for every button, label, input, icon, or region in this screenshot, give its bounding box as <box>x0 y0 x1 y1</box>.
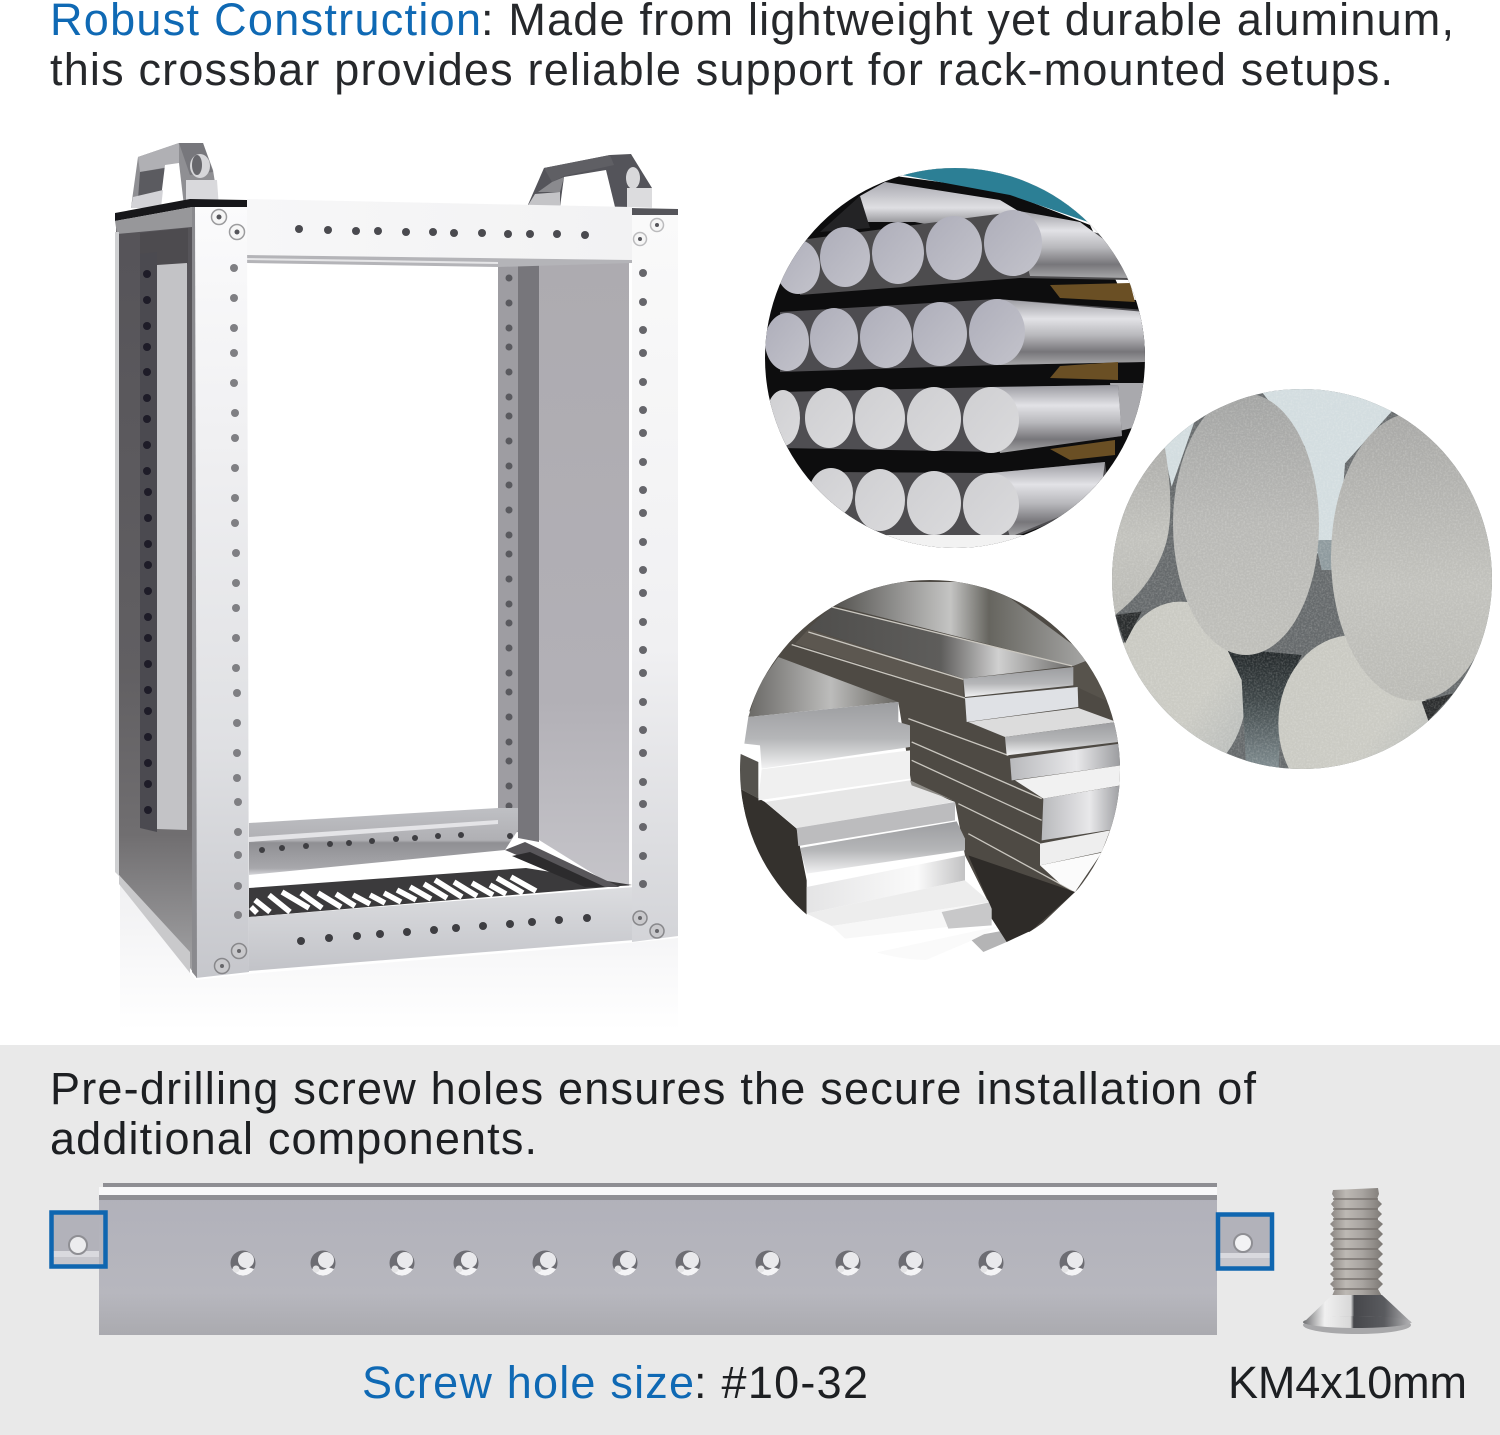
bottom crossbar <box>249 887 634 971</box>
highlight: right mounting hole <box>1218 1214 1272 1268</box>
left plate top <box>748 657 898 717</box>
icon: countersunk screw <box>1303 1188 1412 1334</box>
rod bodies <box>780 210 1145 537</box>
floor reflection <box>120 884 678 1030</box>
label: screw hole size: Screw hole size <box>362 1357 694 1408</box>
dark wedge right <box>1422 693 1453 721</box>
right stepped plates <box>963 667 1073 697</box>
rack product image <box>115 143 678 1030</box>
front right post <box>632 207 678 942</box>
left stepped plates <box>744 702 910 769</box>
lower left rod <box>1124 602 1244 753</box>
photo circle: aluminum rods <box>765 168 1145 550</box>
left rod end <box>1112 448 1170 614</box>
main plate top <box>808 607 1072 679</box>
text: pre-drilling: Pre-drilling screw holes ensures the secure installation of <box>50 1063 1256 1114</box>
text: pre-drilling <box>50 1063 1256 1164</box>
rod end faces <box>765 210 1042 537</box>
rear bottom rail <box>249 808 518 875</box>
dark wedge left <box>1115 612 1142 643</box>
label: screw hole size <box>362 1357 868 1408</box>
left dark edge <box>740 789 807 915</box>
lower centre gap <box>1228 650 1302 768</box>
photo circle: aluminum plates <box>740 580 1120 952</box>
dark plate sides <box>742 575 1130 934</box>
front left post <box>192 207 249 978</box>
highlight: left mounting hole <box>52 1212 106 1266</box>
centre rod end <box>1173 394 1319 655</box>
bottom panel background <box>0 1045 1500 1435</box>
label: screw size: KM4x10mm <box>1228 1357 1467 1408</box>
text: pre-drilling: additional components. <box>50 1113 537 1164</box>
rear plate <box>835 582 1092 666</box>
lower right rod <box>1278 636 1428 769</box>
right handle <box>527 154 652 208</box>
screw holes <box>230 1250 1084 1276</box>
photo circle: rod ends close-up <box>1112 389 1492 769</box>
right rod end <box>1331 413 1499 701</box>
deep shadow gap <box>968 855 1075 942</box>
left handle <box>131 143 219 208</box>
crossbar diagram <box>52 1183 1272 1335</box>
right tab <box>1217 1214 1272 1268</box>
bottom tray with slots <box>249 842 632 917</box>
right inner panel <box>498 262 629 886</box>
sky and top rods <box>820 168 1145 300</box>
top crossbar <box>247 199 632 267</box>
wood spacers <box>1050 283 1135 460</box>
left tab <box>52 1214 99 1266</box>
pale rod sides <box>1162 383 1405 553</box>
crossbar body <box>99 1183 1217 1335</box>
label: screw hole size: : #10-32 <box>694 1357 868 1408</box>
faded lower edge <box>886 535 1024 548</box>
heading: robust construction: this crossbar provides reliable support for rack-mounted setups. <box>50 44 1393 95</box>
left side panel <box>115 199 247 973</box>
heading: robust construction <box>50 0 1454 95</box>
